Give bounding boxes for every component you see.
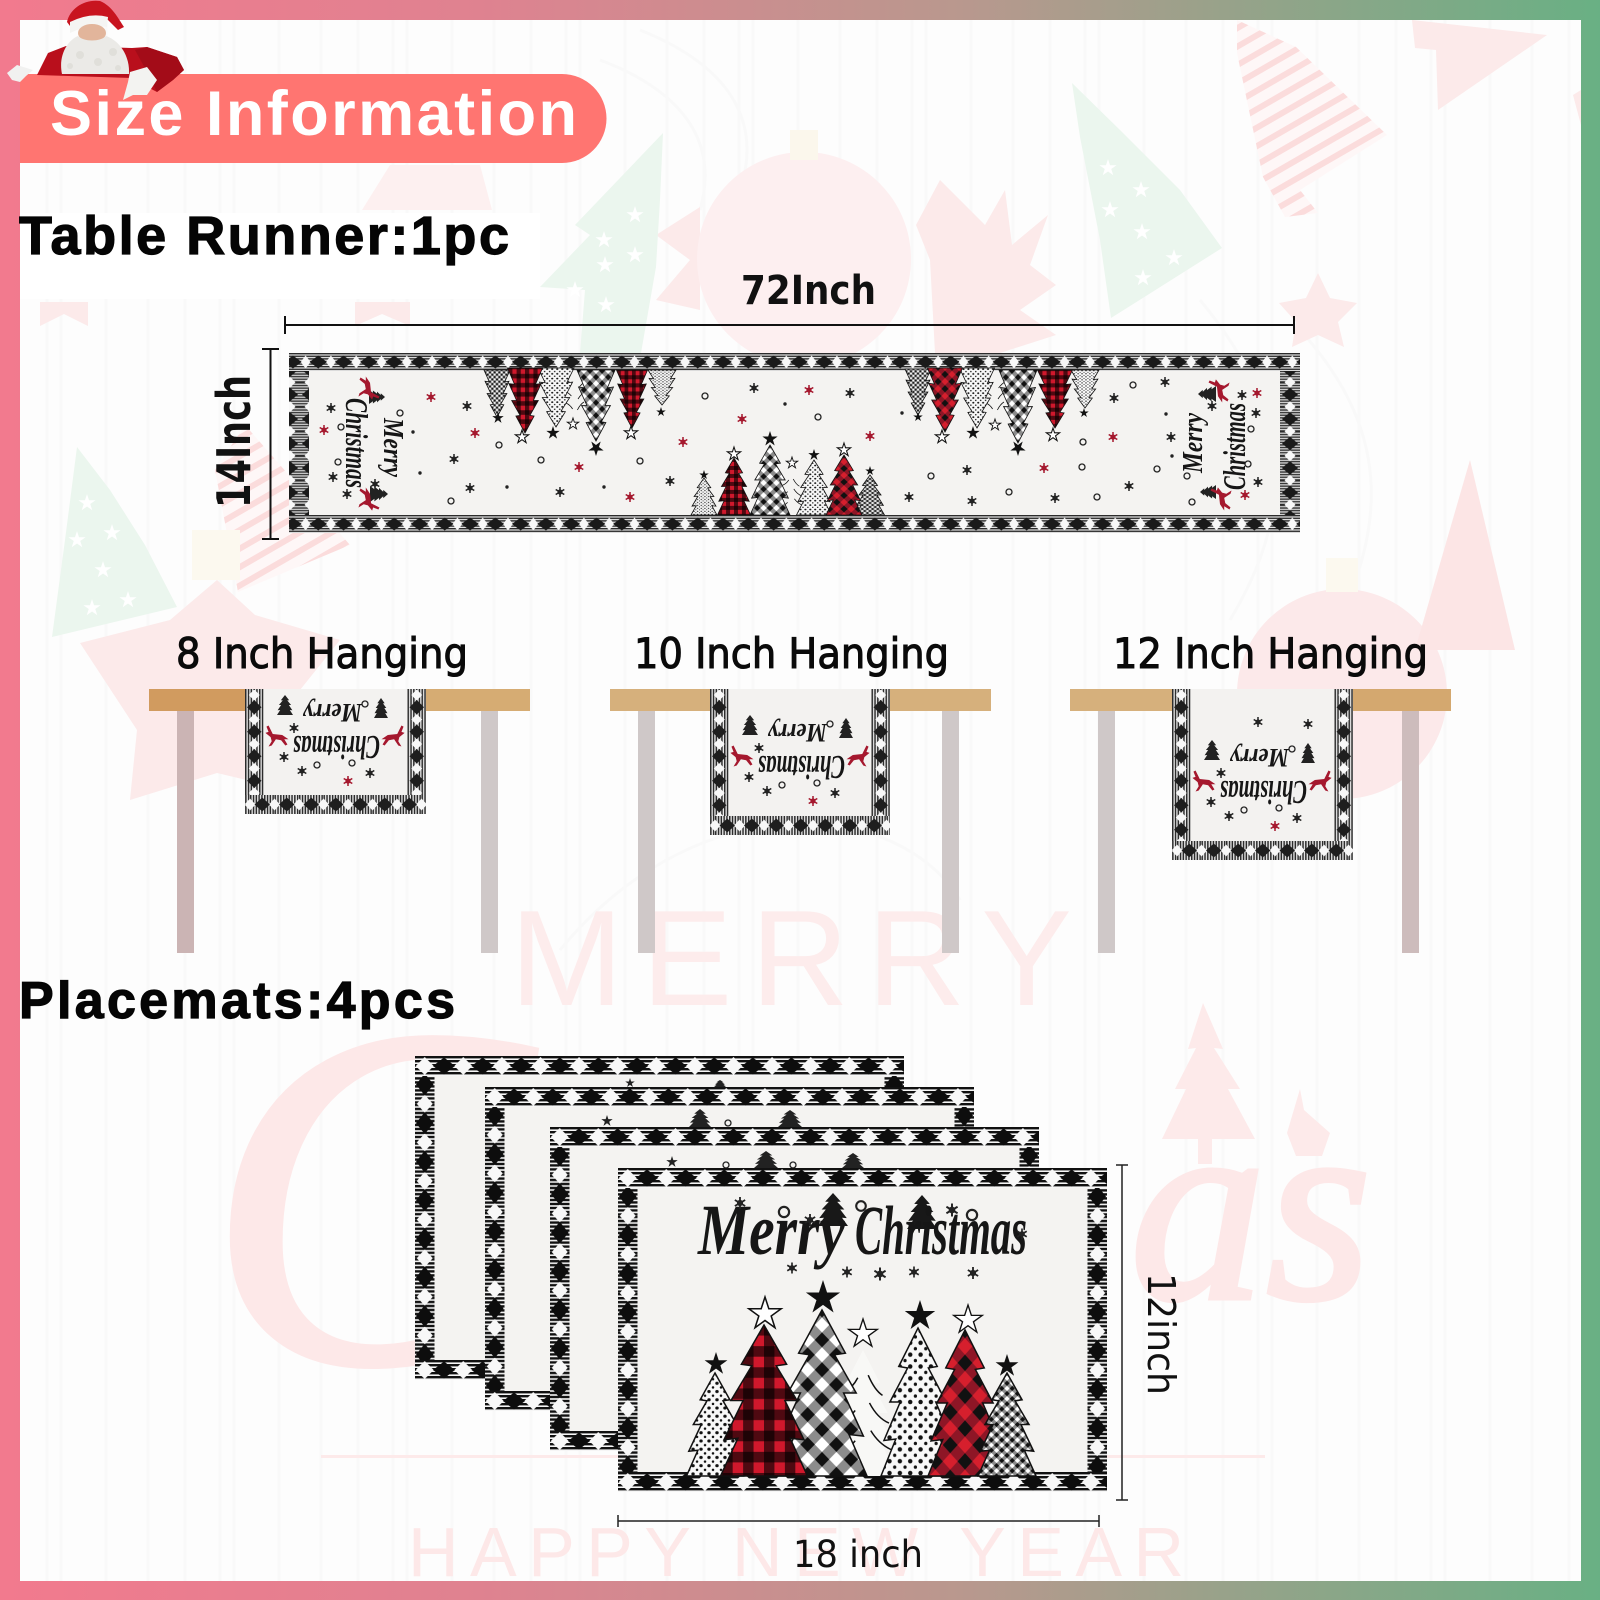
dimension: 12inch: 12inch xyxy=(1139,1273,1183,1395)
background tree: left xyxy=(52,447,177,637)
table runner illustration xyxy=(289,353,1300,533)
dimension: 72Inch xyxy=(285,268,1294,334)
background panel with faint decorations: C xyxy=(205,925,542,1468)
panel: 8 inch hanging: Merry xyxy=(303,698,363,727)
front mat greeting xyxy=(697,1190,1027,1280)
front mat greeting: Christmas xyxy=(855,1193,1027,1270)
cloth art: 8 inch xyxy=(265,695,405,786)
panel: 12 inch hanging: 12 Inch Hanging xyxy=(1113,629,1428,678)
dimension: 14Inch xyxy=(207,349,279,539)
front mat greeting: Merry xyxy=(697,1190,846,1270)
runner: tree top stars xyxy=(492,407,1089,479)
panel: 8 inch hanging: 8 Inch Hanging xyxy=(176,629,468,678)
runner: right greeting: Merry xyxy=(1178,413,1209,474)
front mat tree group xyxy=(686,1310,1036,1476)
heading: Placemats: Placemats:4pcs xyxy=(19,972,455,1030)
runner: left greeting: Christmas xyxy=(339,398,375,488)
peeking ornaments on third mat xyxy=(601,1109,802,1127)
peeking ornaments on second mat xyxy=(625,1078,726,1087)
panel: 10 inch hanging: 10 Inch Hanging xyxy=(634,629,949,678)
dimension: 72Inch: 72Inch xyxy=(741,268,876,314)
cloth art: 10 inch: Merry xyxy=(768,718,828,747)
background tree: top centre xyxy=(540,133,663,353)
cloth: 12 inch xyxy=(1172,689,1353,860)
panel: 12 inch hanging xyxy=(1070,629,1451,953)
front mat tree stars xyxy=(705,1280,1018,1376)
panel: 8 inch hanging: Christmas xyxy=(293,728,380,765)
cloth art: 12 inch: Merry xyxy=(1230,743,1290,772)
runner: hanging trees right xyxy=(905,368,1099,443)
background panel with faint decorations: hristm xyxy=(450,1097,1025,1347)
cloth art: 12 inch xyxy=(1192,717,1332,831)
cloth: 8 inch xyxy=(245,689,426,814)
dimension: 14Inch: 14Inch xyxy=(207,375,261,508)
cloth art: 10 inch: Christmas xyxy=(758,748,845,785)
background panel with faint decorations: MERRY xyxy=(510,882,1072,1034)
front placemat xyxy=(618,1168,1107,1492)
cloth: 10 inch xyxy=(710,689,890,835)
dimension: 18 inch xyxy=(618,1515,1099,1576)
icon: Santa peeking over the title xyxy=(7,1,184,100)
runner: right greeting xyxy=(1178,379,1252,510)
runner: right greeting: Christmas xyxy=(1216,403,1252,490)
runner: scattered small stars xyxy=(320,377,1262,506)
placemat stack xyxy=(415,1056,1107,1492)
cloth art: 10 inch xyxy=(730,715,870,806)
heading: Table Runner xyxy=(19,206,540,299)
title pill: Size Information: Size Information xyxy=(50,79,577,149)
panel: 8 inch hanging xyxy=(149,629,530,953)
dimension: 12inch xyxy=(1116,1165,1183,1500)
peeking ornaments on fourth mat xyxy=(666,1151,864,1168)
heading: Table Runner: Table Runner:1pc xyxy=(19,206,509,266)
runner: left greeting: Merry xyxy=(377,417,408,477)
runner: left greeting xyxy=(339,376,408,511)
runner: hanging trees left xyxy=(484,368,676,441)
background panel with faint decorations: HAPPY NEW YEAR xyxy=(408,1513,1184,1591)
runner: upright trees centre xyxy=(691,445,884,515)
background tree: top right xyxy=(1072,83,1222,318)
background panel with faint decorations: as xyxy=(1130,1056,1372,1357)
panel: 10 inch hanging xyxy=(610,629,991,953)
cloth art: 12 inch: Christmas xyxy=(1220,773,1307,810)
dimension: 18 inch: 18 inch xyxy=(793,1533,923,1576)
